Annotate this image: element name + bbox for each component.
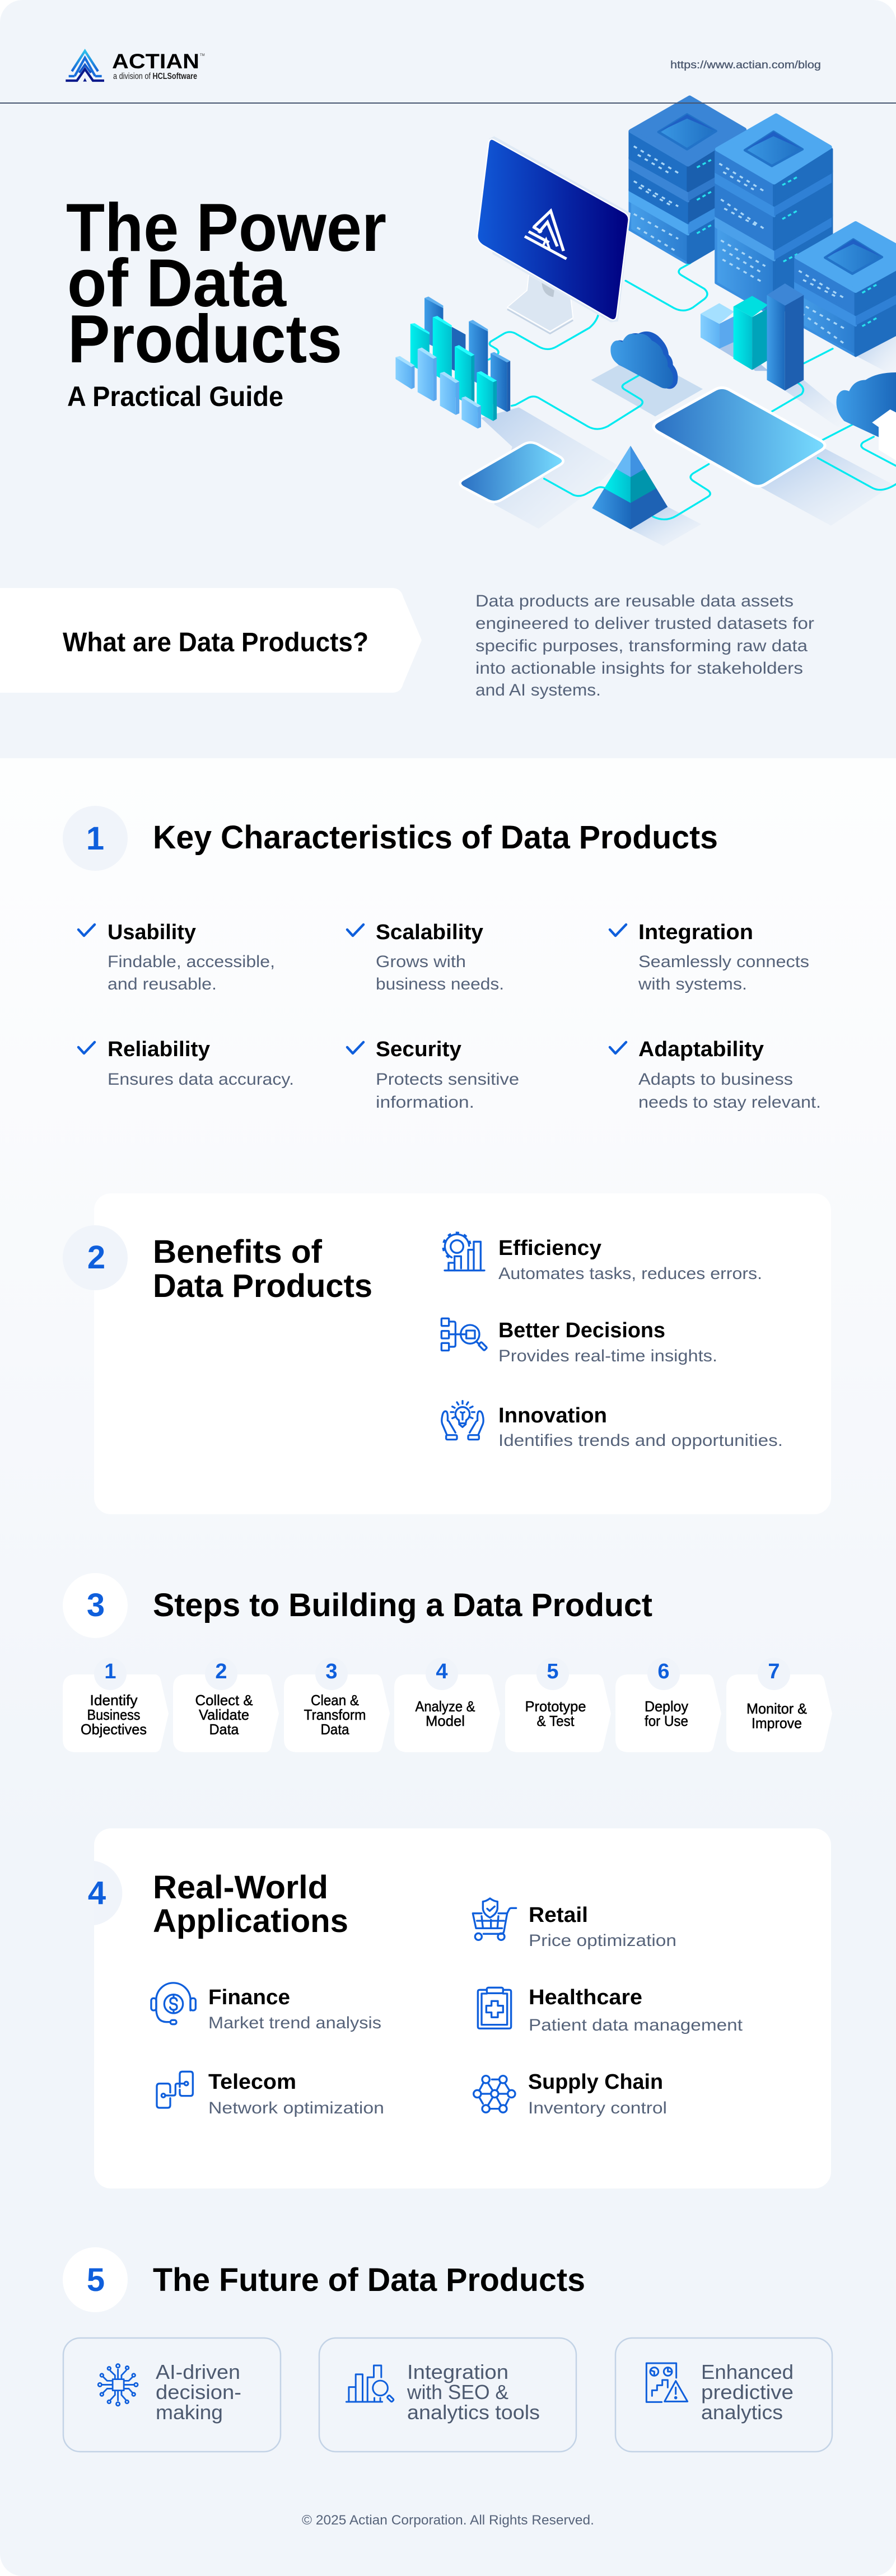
step 6: [615, 1658, 721, 1752]
box text: [407, 2360, 540, 2424]
item: security: Protects sensitive: [376, 1070, 519, 1089]
step 3: Transform: [304, 1706, 366, 1723]
item: integration: Seamlessly connects: [638, 953, 809, 971]
application: telecom: Network optimization: [208, 2099, 384, 2117]
step 1: [63, 1658, 169, 1752]
number badge 1: [63, 806, 128, 871]
benefit: innovation: [498, 1404, 783, 1450]
box text: analytics tools: [407, 2401, 540, 2424]
icon: bars and magnifier: [346, 2365, 394, 2402]
heading: Steps to Building a Data Product: [153, 1587, 652, 1623]
benefit: better decisions: Provides real-time insights.: [498, 1347, 717, 1365]
application: retail: Retail: [529, 1903, 588, 1927]
benefit: better decisions: [498, 1319, 717, 1365]
item: integration: Integration: [638, 921, 753, 944]
logo wordmark: ACTIAN: [112, 50, 199, 73]
number badge 3: 3: [87, 1587, 105, 1623]
step 2: Validate: [199, 1706, 249, 1723]
item: adaptability: needs to stay relevant.: [638, 1093, 821, 1112]
step 4: 4: [436, 1660, 448, 1683]
item: adaptability: Adapts to business: [638, 1070, 793, 1089]
card background: [94, 1828, 831, 2188]
large tablet: [654, 388, 825, 486]
benefit: better decisions: Better Decisions: [498, 1319, 665, 1342]
cloud: [612, 332, 678, 389]
icon: hands and bulb: [442, 1401, 483, 1440]
application: healthcare: Healthcare: [529, 1986, 642, 2009]
footer copyright: © 2025 Actian Corporation. All Rights Reserved.: [302, 2513, 594, 2528]
box text: AI-driven: [156, 2360, 240, 2383]
definition text: [475, 592, 814, 699]
small phone: [460, 442, 563, 502]
step 7: 7: [768, 1660, 780, 1683]
logo tagline: a division of HCLSoftware: [113, 72, 197, 81]
item: security: information.: [376, 1093, 474, 1112]
connector lines: [488, 263, 896, 520]
definition text: Data products are reusable data assets: [475, 592, 794, 610]
benefit: innovation: Innovation: [498, 1404, 607, 1427]
item: integration: [610, 921, 809, 993]
number badge 5: [63, 2247, 128, 2312]
panel: what are data products: [0, 588, 814, 699]
step 5: [505, 1658, 611, 1752]
light content background: [0, 758, 896, 1848]
header divider: [0, 102, 896, 104]
step 3: Data: [320, 1721, 349, 1738]
box text: Enhanced: [701, 2360, 794, 2383]
number badge 2: [63, 1225, 128, 1290]
definition text: into actionable insights for stakeholders: [475, 659, 803, 678]
step 6: 6: [657, 1660, 670, 1683]
step 4: Analyze &: [416, 1698, 475, 1715]
hero illustration: [395, 97, 896, 546]
heading: Real-World: [153, 1869, 328, 1906]
banner heading: What are Data Products?: [63, 628, 368, 657]
application: finance: Market trend analysis: [208, 2014, 381, 2032]
subtitle: A Practical Guide: [67, 381, 283, 412]
item: usability: and reusable.: [108, 975, 217, 993]
icon: telecom devices: [157, 2071, 193, 2108]
title: of Data: [67, 245, 287, 321]
definition text: specific purposes, transforming raw data: [475, 637, 808, 655]
icon: supply network: [474, 2076, 515, 2112]
item: scalability: Grows with: [376, 953, 466, 971]
icon: finance headset: [151, 1983, 195, 2024]
card background: [94, 1193, 831, 1514]
icon: gear and bars: [444, 1233, 484, 1271]
item: scalability: business needs.: [376, 975, 504, 993]
item: security: Security: [376, 1038, 461, 1061]
cloud with upload arrow: [836, 372, 896, 460]
item: security: [347, 1038, 519, 1112]
step 3: 3: [325, 1660, 338, 1683]
number badge 3: [63, 1573, 128, 1638]
icon: dashboard warning: [646, 2363, 688, 2402]
icon: shopping cart: [473, 1898, 516, 1940]
monitor logo: [525, 211, 567, 259]
application: healthcare: [529, 1986, 743, 2034]
step 2: [173, 1658, 279, 1752]
number badge 4: 4: [88, 1875, 106, 1911]
box text: analytics: [701, 2401, 783, 2424]
step 7: Improve: [752, 1715, 802, 1732]
server stack middle: [716, 115, 832, 316]
step 7: Monitor &: [746, 1700, 807, 1717]
benefit: efficiency: Automates tasks, reduces errors.: [498, 1264, 762, 1283]
heading: Data Products: [153, 1268, 372, 1304]
benefit: innovation: Identifies trends and opportunities.: [498, 1431, 783, 1450]
server stack front: [796, 223, 896, 356]
heading: [153, 1869, 348, 1939]
item: usability: Findable, accessible,: [108, 953, 275, 971]
step 1: Identify: [90, 1692, 138, 1709]
heading: The Future of Data Products: [153, 2262, 585, 2298]
benefit: efficiency: [498, 1236, 762, 1283]
box: predictive analytics: [615, 2338, 832, 2452]
box text: decision-: [156, 2381, 241, 2404]
section 4: applications card: [88, 1828, 831, 2188]
step 5: 5: [547, 1660, 559, 1683]
step 3: Clean &: [311, 1692, 359, 1709]
bar chart cluster: [395, 296, 510, 428]
heading: Applications: [153, 1903, 348, 1939]
step 2: 2: [215, 1660, 227, 1683]
step 7: [726, 1658, 832, 1752]
box text: making: [156, 2401, 223, 2424]
arrow banner: [0, 588, 422, 693]
server stack back: [630, 97, 746, 263]
box text: [701, 2360, 794, 2424]
section 1: key characteristics: [63, 806, 821, 1112]
item: reliability: Reliability: [108, 1038, 210, 1061]
icon: medical clipboard: [478, 1987, 511, 2028]
floor shadows: [481, 333, 896, 546]
step 2: Data: [209, 1721, 239, 1738]
application: finance: Finance: [208, 1986, 290, 2009]
application: supply chain: Supply Chain: [528, 2070, 663, 2094]
item: adaptability: Adaptability: [638, 1038, 764, 1061]
section 3: steps: [63, 1573, 832, 1752]
number badge 4: [88, 1861, 122, 1925]
cube and bars: [701, 283, 804, 391]
number badge 1: 1: [86, 820, 104, 857]
application: retail: Price optimization: [529, 1931, 676, 1950]
title: [66, 189, 386, 377]
item: reliability: [78, 1038, 294, 1089]
benefit: efficiency: Efficiency: [498, 1236, 601, 1260]
website url: https://www.actian.com/blog: [670, 59, 821, 71]
icon: flow magnifier: [441, 1318, 487, 1351]
logo mark: [66, 51, 104, 82]
step 3: [284, 1658, 390, 1752]
item: integration: with systems.: [638, 975, 747, 993]
cloud front: [610, 334, 673, 389]
application: supply chain: Inventory control: [528, 2099, 667, 2117]
definition text: and AI systems.: [475, 681, 601, 699]
step 5: & Test: [536, 1712, 575, 1729]
box: ai-driven decision-making: [63, 2338, 281, 2452]
step 6: Deploy: [645, 1698, 688, 1715]
item: adaptability: [610, 1038, 821, 1112]
heading: [153, 1234, 372, 1304]
step 4: [394, 1658, 500, 1752]
application: telecom: [208, 2070, 384, 2117]
section 5: the future: [63, 2247, 832, 2452]
pyramid: [592, 446, 668, 529]
heading: Benefits of: [153, 1234, 323, 1270]
step 5: Prototype: [525, 1698, 586, 1715]
item: usability: Usability: [108, 921, 196, 944]
box: seo integration: [319, 2338, 576, 2452]
number badge 5: 5: [87, 2262, 105, 2298]
step 1: 1: [104, 1660, 116, 1683]
step 6: for Use: [645, 1712, 688, 1729]
application: healthcare: Patient data management: [529, 2016, 743, 2034]
definition text: engineered to deliver trusted datasets for: [475, 614, 814, 633]
logo: [66, 50, 205, 82]
title: The Power: [66, 189, 386, 265]
box text: [156, 2360, 241, 2424]
item: scalability: [347, 921, 504, 993]
item: reliability: Ensures data accuracy.: [108, 1070, 294, 1089]
box text: with SEO &: [407, 2381, 508, 2404]
item: usability: [78, 921, 275, 993]
application: telecom: Telecom: [208, 2070, 296, 2094]
application: finance: [208, 1986, 381, 2032]
box text: Integration: [407, 2360, 508, 2383]
icon: ai chip: [98, 2364, 138, 2406]
application: retail: [529, 1903, 676, 1950]
number badge 2: 2: [87, 1239, 105, 1276]
step 1: Objectives: [81, 1721, 147, 1738]
logo trademark: TM: [200, 54, 205, 57]
monitor: [477, 136, 631, 334]
box text: predictive: [701, 2381, 794, 2404]
step 4: Model: [426, 1712, 465, 1729]
item: scalability: Scalability: [376, 921, 483, 944]
title: Products: [68, 301, 342, 377]
step 2: Collect &: [195, 1692, 253, 1709]
application: supply chain: [528, 2070, 667, 2117]
section 2: benefits card: [63, 1193, 831, 1514]
heading: Key Characteristics of Data Products: [153, 819, 718, 856]
step 1: Business: [87, 1706, 140, 1723]
